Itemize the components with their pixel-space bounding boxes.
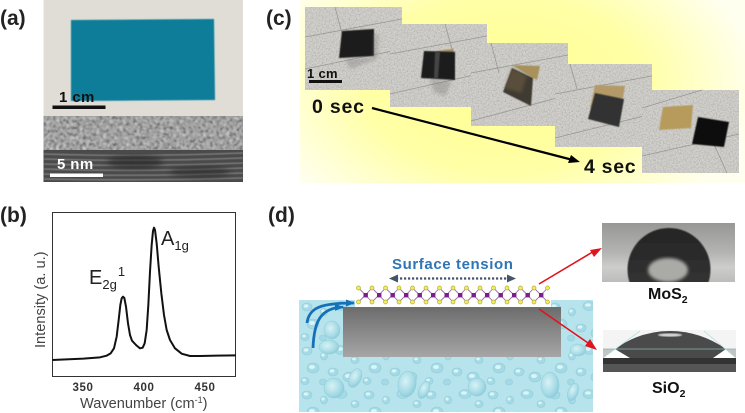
arrow: time from 0 to 4 sec xyxy=(372,108,580,163)
substrate block xyxy=(343,307,561,357)
white gap behind MoS2 layer xyxy=(355,285,551,307)
peak label A1g: A xyxy=(161,228,174,250)
blue film sample xyxy=(71,19,215,101)
photo 1: 0 sec xyxy=(305,7,402,90)
panel b: Raman spectrum chart xyxy=(33,212,236,412)
scale bar 1 cm: 1 cm xyxy=(59,89,95,106)
photo 4 xyxy=(555,64,652,147)
x axis title: ) xyxy=(203,396,208,412)
panel label: (d): (d) xyxy=(268,204,295,227)
label: SiO2: SiO xyxy=(652,380,680,397)
panel label: (c): (c) xyxy=(266,7,292,30)
label: MoS2: 2 xyxy=(682,294,688,306)
peak label E2g1: 1 xyxy=(118,264,125,279)
panel c: yellow time-lapse background xyxy=(300,0,745,183)
scale bar 5 nm: 5 nm xyxy=(57,156,94,173)
scale bar 1 cm: 1 cm xyxy=(307,66,338,81)
x axis title: -1 xyxy=(195,395,203,405)
photo 5: 4 sec xyxy=(642,90,739,173)
label: Surface tension: Surface tension xyxy=(392,256,514,273)
panel label: (a): (a) xyxy=(0,7,26,30)
label 4 sec: 4 sec xyxy=(584,156,636,178)
MoS2 layer lattice xyxy=(356,285,550,305)
panel label: (b): (b) xyxy=(0,204,27,227)
photo 2 xyxy=(390,24,487,107)
panel d: water with droplets xyxy=(299,300,593,412)
spectrum curve xyxy=(52,228,236,360)
double arrow: surface tension xyxy=(389,274,516,282)
label: MoS2: MoS xyxy=(648,286,682,303)
x axis tick labels xyxy=(72,382,216,394)
peak label A1g: 1g xyxy=(174,238,189,253)
y axis title: Intensity (a. u.) xyxy=(33,251,49,348)
peak label E2g1: E xyxy=(89,267,102,289)
photo: MoS2 contact angle xyxy=(602,223,735,282)
label: SiO2: 2 xyxy=(680,388,686,400)
red arrow to MoS2 photo xyxy=(539,248,602,284)
panel a: TEM image xyxy=(44,116,243,182)
red arrow to SiO2 photo xyxy=(539,309,597,350)
photo: SiO2 contact angle xyxy=(603,330,736,372)
arrows: water flow xyxy=(307,303,354,348)
x axis title: Wavenumber (cm xyxy=(80,396,195,412)
x axis tick labels: 350 xyxy=(72,382,94,394)
x axis tick labels: 400 xyxy=(134,382,154,394)
peak label E2g1: 2g xyxy=(102,277,117,292)
panel a: photo of blue film xyxy=(44,0,243,116)
photo 3 xyxy=(471,43,568,126)
label 0 sec: 0 sec xyxy=(312,96,365,118)
scale bar 5 nm xyxy=(50,156,103,177)
scale bar 1 cm xyxy=(52,89,106,109)
x axis tick labels: 450 xyxy=(194,382,216,394)
